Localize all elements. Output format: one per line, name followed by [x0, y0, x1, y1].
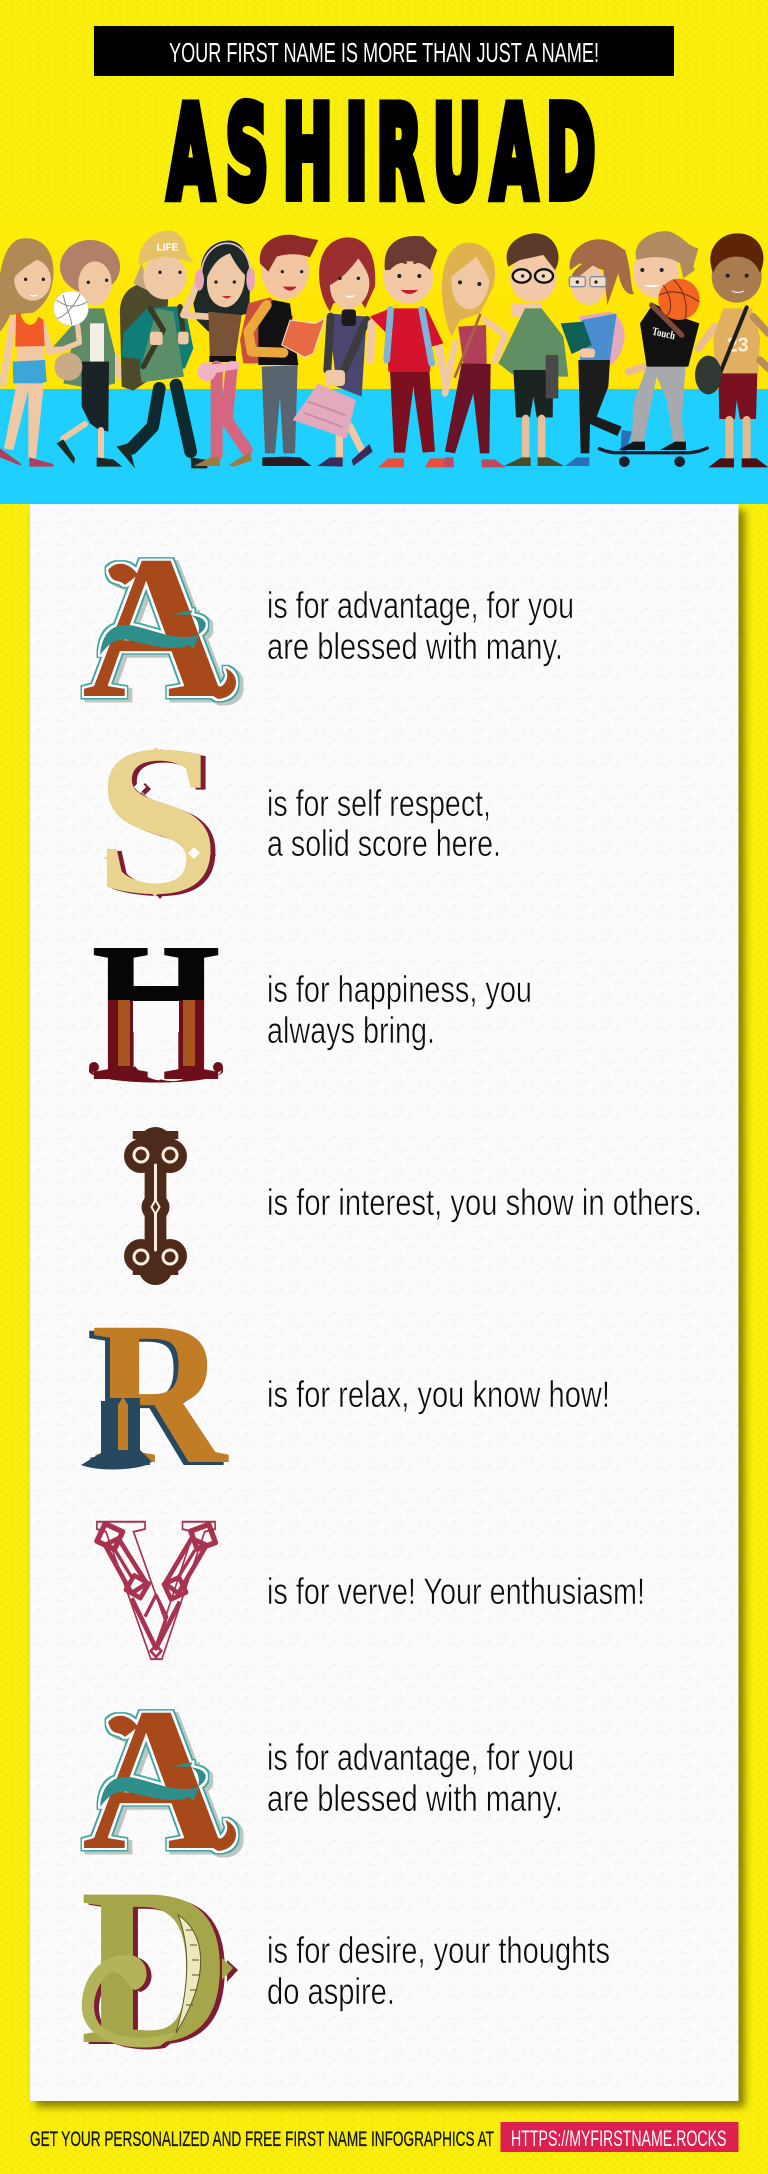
students right group [370, 231, 768, 467]
row I: drop cap [124, 1079, 187, 1323]
row S: text [267, 783, 501, 864]
students left group [0, 231, 375, 468]
row A second: text: is for advantage, for you [267, 1737, 574, 1778]
title: name: ASHIRUAD [168, 81, 595, 227]
yellow backdrop [0, 215, 768, 390]
row S: drop cap: S [95, 700, 220, 939]
blue ground [0, 389, 768, 504]
row A: text [267, 585, 574, 667]
row S: text: is for self respect, [267, 783, 491, 824]
row V: drop cap: V [95, 1474, 217, 1701]
panel: letter meanings [30, 504, 745, 2107]
row D: drop cap: D [80, 1841, 230, 2091]
student 8: blonde girl [442, 243, 506, 467]
row A: drop cap: A [82, 514, 230, 741]
student 3: boy with cap and backpack [117, 231, 207, 468]
row H: text: always bring. [267, 1010, 435, 1051]
student 5: boy with book [240, 235, 325, 466]
student 4: girl with headphones [183, 241, 255, 467]
row R: text: is for relax, you know how! [267, 1374, 610, 1415]
row A second: text [267, 1737, 574, 1819]
student 12: boy with shoulder bag: 23 [727, 334, 749, 357]
row A second: text: are blessed with many. [267, 1778, 563, 1819]
row I: drop cap: I [128, 1079, 183, 1323]
student 6: girl with pink bag [293, 237, 375, 467]
student 7: boy in red shirt [370, 236, 453, 467]
student 12: boy with shoulder bag [695, 233, 768, 467]
student 3: boy with cap and backpack: LIFE [157, 243, 179, 254]
row A: text: are blessed with many. [267, 626, 563, 667]
row H: drop cap: H [91, 902, 221, 1123]
illustration: band of students [0, 215, 768, 504]
student 11: skater with basketball: Touch [651, 326, 677, 342]
row H: text: is for happiness, you [267, 969, 532, 1010]
row A second: drop cap: A [82, 1666, 230, 1893]
row H: text [267, 969, 532, 1051]
footer call to action: GET YOUR PERSONALIZED AND FREE FIRST NAME INFOGRAPHICS AT [30, 2128, 494, 2151]
row D: text: do aspire. [267, 1971, 395, 2012]
row D: inner ornament [176, 1915, 201, 2033]
student 2: girl with volleyball [53, 240, 122, 467]
row D: text: is for desire, your thoughts [267, 1930, 610, 1971]
student 10: girl with ponytail [561, 239, 634, 466]
student 9: boy with glasses [498, 233, 568, 466]
row A: text: is for advantage, for you [267, 585, 574, 626]
row R: drop cap: R [91, 1280, 229, 1507]
heading banner [94, 26, 674, 76]
student 11: skater with basketball [599, 231, 715, 467]
student 1: girl with orange top [0, 238, 77, 467]
row V: text: is for verve! Your enthusiasm! [267, 1571, 645, 1612]
row S: text: a solid score here. [267, 823, 501, 864]
row D: text [267, 1930, 610, 2012]
